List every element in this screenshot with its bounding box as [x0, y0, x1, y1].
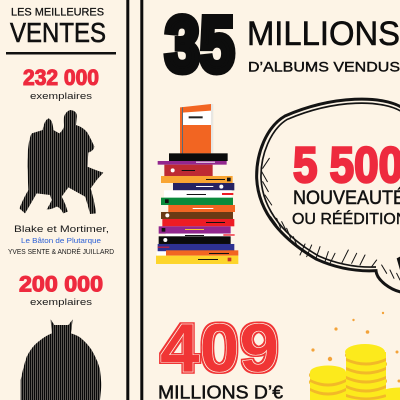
- stat: 232 000 exemplaires: 232 000: [23, 65, 99, 90]
- icon: stacks of gold coins: [309, 312, 400, 400]
- stat: 5 500 nouveautés ou rééditions: 5 500: [293, 136, 400, 193]
- heading: les meilleures ventes: VENTES: [10, 17, 106, 48]
- stat: 200 000 exemplaires: [19, 272, 103, 308]
- heading: les meilleures ventes: LES MEILLEURES: [11, 6, 104, 18]
- right coin stack: [382, 388, 400, 400]
- stat: 200 000 exemplaires: exemplaires: [30, 297, 92, 308]
- stat: 35 millions d'albums vendus: 35: [165, 0, 234, 88]
- stat: 5 500 nouveautés ou rééditions: [292, 136, 400, 228]
- sparkles around coins: [311, 312, 400, 382]
- icon: cat silhouette: [21, 319, 101, 400]
- icon: stack of books: [156, 104, 238, 264]
- stat: 35 millions d'albums vendus: [165, 0, 400, 88]
- stat: 200 000 exemplaires: 200 000: [19, 272, 103, 296]
- stat: 409 millions d'euros: 409: [160, 310, 279, 386]
- main coin stack: [345, 344, 386, 400]
- caption: Blake et Mortimer: [8, 224, 114, 256]
- caption: Blake et Mortimer: Blake et Mortimer,: [14, 224, 109, 235]
- column divider lines: [126, 0, 143, 400]
- stat: 35 millions d'albums vendus: D’ALBUMS VENDUS: [248, 58, 400, 74]
- stat: 232 000 exemplaires: exemplaires: [30, 91, 92, 102]
- speech bubble with hatching: [257, 99, 400, 293]
- heading: les meilleures ventes: [6, 6, 116, 54]
- caption: Blake et Mortimer: YVES SENTE & ANDRÉ JUILLARD: [8, 247, 114, 256]
- caption: Blake et Mortimer: Le Bâton de Plutarque: [21, 236, 101, 245]
- stat: 232 000 exemplaires: [23, 65, 99, 102]
- icon: Blake and Mortimer silhouette: [19, 110, 103, 214]
- left coin stack: [310, 366, 346, 400]
